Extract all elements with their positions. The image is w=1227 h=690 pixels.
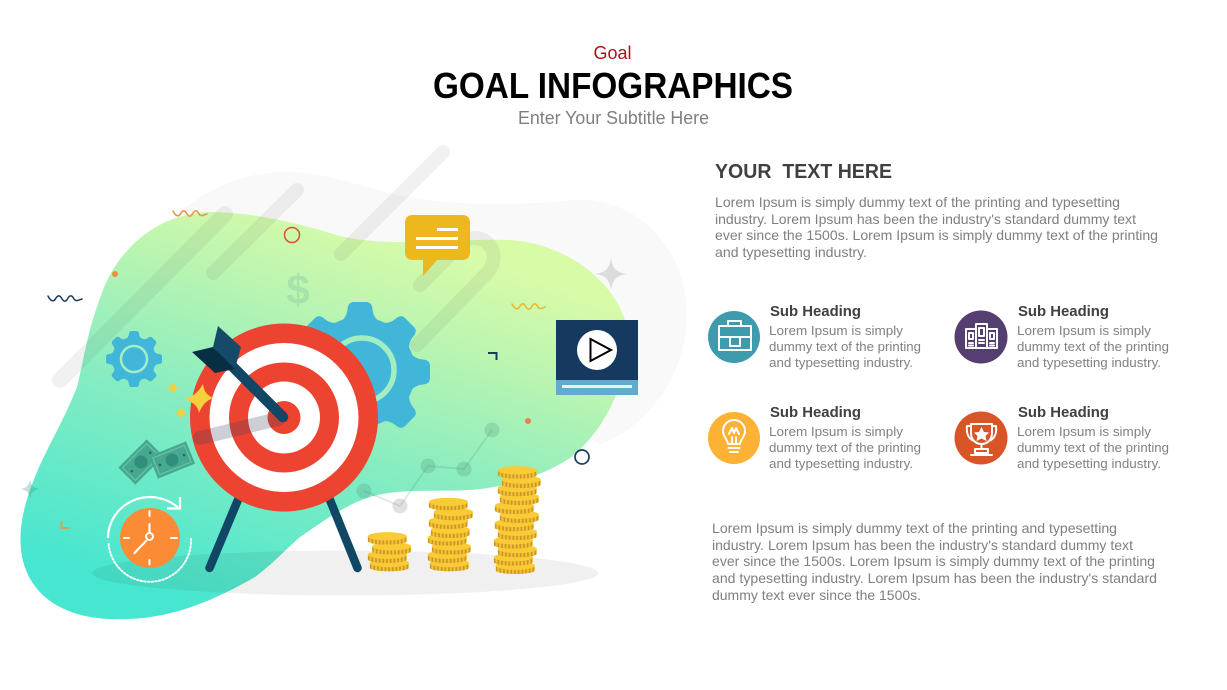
bottom paragraph: industry. Lorem Ipsum has been the industry's standard dummy text <box>712 537 1133 553</box>
large gear <box>290 302 430 442</box>
bottom paragraph: and typesetting industry. Lorem Ipsum has been the industry's standard <box>712 570 1157 586</box>
panel: sub heading trophy: Sub Heading <box>1018 404 1109 421</box>
panel: sub heading trophy <box>954 404 1169 471</box>
video player <box>556 320 638 395</box>
panel: sub heading briefcase: Lorem Ipsum is simply <box>769 323 904 338</box>
coin stacks <box>368 466 541 574</box>
bottom paragraph: Lorem Ipsum is simply dummy text of the printing and typesetting <box>712 520 1117 536</box>
intro paragraph <box>715 194 1158 260</box>
small gear <box>106 331 162 387</box>
panel: sub heading light bulb <box>708 404 921 471</box>
panel: sub heading briefcase <box>708 303 921 370</box>
chat bubble <box>405 215 470 276</box>
bottom paragraph: ever since the 1500s. Lorem Ipsum is simply dummy text of the printing <box>712 553 1155 569</box>
subtitle: Enter Your Subtitle Here <box>518 108 709 128</box>
icon: light bulb <box>708 412 760 464</box>
title: GOAL INFOGRAPHICS <box>433 65 793 106</box>
goal label: Goal <box>593 43 632 63</box>
panel: sub heading light bulb: Lorem Ipsum is simply <box>769 424 904 439</box>
diagonal grey stripes <box>60 152 494 380</box>
gold sparkles <box>168 383 213 418</box>
panel: sub heading light bulb: and typesetting industry. <box>769 456 913 471</box>
panel: sub heading trophy: Lorem Ipsum is simply <box>1017 424 1152 439</box>
grey sparkle left <box>20 479 40 499</box>
panel: sub heading buildings: and typesetting industry. <box>1017 355 1161 370</box>
panel: sub heading light bulb: dummy text of the printing <box>769 440 921 455</box>
panel: sub heading briefcase: and typesetting industry. <box>769 355 913 370</box>
intro paragraph: industry. Lorem Ipsum has been the industry's standard dummy text <box>715 211 1136 227</box>
intro paragraph: Lorem Ipsum is simply dummy text of the printing and typesetting <box>715 194 1120 210</box>
clock with arrow <box>108 497 191 582</box>
panel: sub heading buildings: Sub Heading <box>1018 303 1109 320</box>
dollar sign: $ <box>286 266 310 313</box>
heading: YOUR TEXT HERE <box>715 161 892 183</box>
icon: briefcase <box>708 311 760 363</box>
target <box>190 324 378 512</box>
money bills <box>118 439 195 485</box>
ground shadow <box>92 550 598 596</box>
intro paragraph: and typesetting industry. <box>715 244 867 260</box>
grey sparkle right <box>595 258 627 290</box>
line chart <box>356 422 500 514</box>
panel: sub heading briefcase: dummy text of the printing <box>769 339 921 354</box>
bottom paragraph: dummy text ever since the 1500s. <box>712 587 921 603</box>
illustration: goal target scene <box>20 152 687 619</box>
grey background blob <box>150 172 687 445</box>
icon: buildings <box>954 310 1008 364</box>
panel: sub heading buildings <box>954 303 1169 370</box>
green gradient blob <box>20 212 627 619</box>
intro paragraph: ever since the 1500s. Lorem Ipsum is simply dummy text of the printing <box>715 227 1158 243</box>
decorative dots and rings <box>62 228 589 528</box>
dart <box>192 326 283 417</box>
panel: sub heading trophy: and typesetting industry. <box>1017 456 1161 471</box>
bottom paragraph <box>712 520 1157 603</box>
panel: your text here <box>715 161 1158 260</box>
panel: sub heading trophy: dummy text of the printing <box>1017 440 1169 455</box>
panel: sub heading buildings: dummy text of the printing <box>1017 339 1169 354</box>
panel: sub heading light bulb: Sub Heading <box>770 404 861 421</box>
panel: sub heading briefcase: Sub Heading <box>770 303 861 320</box>
decorative waves <box>48 211 545 309</box>
icon: trophy <box>954 412 1008 464</box>
panel: sub heading buildings: Lorem Ipsum is simply <box>1017 323 1152 338</box>
target stand legs <box>210 495 358 568</box>
